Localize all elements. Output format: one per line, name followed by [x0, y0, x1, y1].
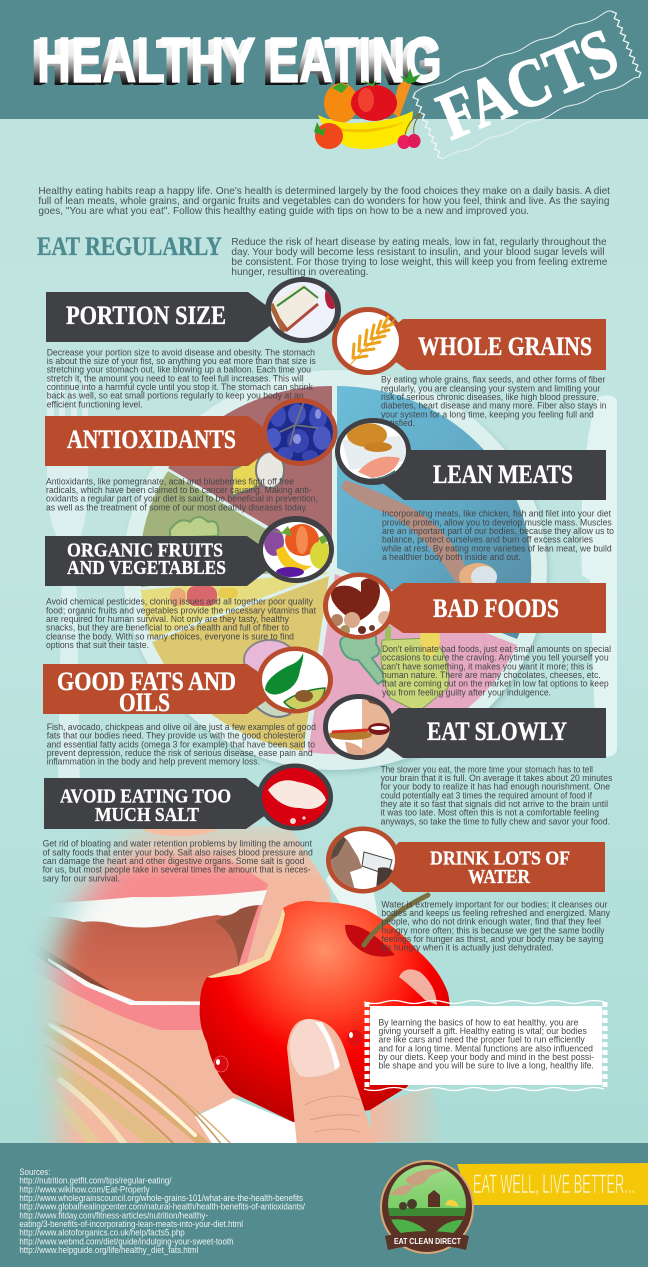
text: options that suit their taste.: [46, 640, 149, 651]
icon: avocado: [257, 646, 333, 714]
stem: [364, 895, 428, 945]
icon: man drinking: [326, 826, 400, 894]
text: sary for our survival.: [43, 873, 120, 884]
text: [46, 597, 316, 651]
sources list: eating/3-benefits-of-incorporating-lean-meats-into-your-diet.html: [19, 1218, 243, 1229]
text: you from feeling guilty after your indulgence.: [382, 687, 551, 698]
intro text: full of lean meats, whole grains, and organic fruits and vegetables can do wonders for how you feel, think and live. As the saying: [38, 196, 610, 207]
sources list: http://www.alotoforganics.co.uk/help/facts5.php: [19, 1227, 185, 1238]
heading: PORTION SIZE: [66, 301, 226, 330]
heading: [430, 848, 570, 888]
banner: [382, 319, 606, 370]
text: Fish, avocado, chickpeas and olive oil are just a few examples of good: [47, 722, 316, 733]
text: provide protein, allow you to develop muscle mass. Muscles: [382, 517, 612, 528]
text: diabetes, heart disease and many more. Fiber also stays in: [381, 401, 607, 412]
icon: salt: [257, 764, 333, 830]
water drops: [214, 1056, 228, 1072]
text: is about the size of your fist, so anything you eat more than that size is: [47, 356, 316, 367]
text: [381, 899, 610, 954]
text: eat regularly: [231, 237, 608, 278]
panel: organic fruits and vegetables: [45, 516, 334, 651]
intro text: [38, 186, 610, 217]
text: fats that our bodies need. They provide us with the good cholesterol: [47, 731, 305, 742]
right hand: [370, 1085, 445, 1142]
text: Incorporating meats, like chicken, fish and filet into your diet: [382, 509, 611, 520]
footer band: [0, 1143, 648, 1267]
upper lip: [67, 850, 268, 902]
nose shadow: [142, 818, 218, 836]
text: Antioxidants, like pomegranate, acai and blueberries fight off free: [46, 476, 294, 487]
text: and essential fatty acids (omega 3 for example) that have been said to: [47, 739, 315, 750]
icon: chicken and salmon: [335, 418, 412, 485]
hair: [40, 1020, 232, 1145]
heading: BAD FOODS: [433, 594, 559, 623]
bite flesh: [207, 908, 285, 978]
banner: [384, 450, 606, 500]
text: eat regularly: be consistent. For those trying to lose weight, this will keep you from feeling extreme: [231, 257, 608, 268]
text: oxidants a regular part of your diet is said to be beneficial in prevention,: [46, 494, 318, 505]
tan wedge: [152, 576, 329, 751]
apple highlight: [399, 969, 437, 1005]
header band: [0, 0, 648, 119]
text: they ate it so fast that signals did not arrive to the brain until: [381, 799, 608, 810]
icon: fruit bowl: [314, 68, 421, 149]
panel: avoid eating too much salt: [43, 764, 333, 884]
panel: bad foods: [323, 572, 611, 698]
text: continue into a harmful cycle until you stop it. The stomach can shrink: [47, 382, 313, 393]
callout: conclusion: ble shape and you will be sure to live a long, healthy life.: [378, 1061, 594, 1072]
banner: [44, 778, 270, 829]
intro text: goes, "You are what you eat". Follow this healthy eating guide with tips on how to be a new and improved you.: [38, 206, 529, 217]
title: HEALTHY EATING: [37, 24, 442, 96]
callout: conclusion: [364, 1000, 605, 1090]
lower lip: [44, 963, 202, 1030]
text: [381, 375, 607, 429]
panel: lean meats: [335, 418, 614, 563]
banner: [46, 292, 275, 342]
text: can't have something, it makes you want it more; this is: [382, 661, 593, 672]
text: a healthier body both inside and out.: [382, 552, 521, 563]
banner: [380, 583, 606, 633]
face skin: [41, 826, 332, 1143]
banner: [43, 664, 270, 714]
sources list: http://www.wholegrainscouncil.org/whole-grains-101/what-are-the-health-benefits: [19, 1192, 303, 1203]
text: stretch it, the amount you need to eat to feel full increases. This will: [47, 373, 304, 384]
text: [381, 509, 614, 563]
title: HEALTHY EATING: [35, 26, 441, 98]
apple: [200, 895, 450, 1122]
sources list: http://www.globalhealingcenter.com/natural-health/health-benefits-of-antioxidants/: [19, 1201, 305, 1212]
logo: eat clean direct: [380, 1160, 474, 1254]
text: eat regularly: hunger, resulting in overeating.: [231, 267, 369, 278]
banner: [45, 416, 272, 466]
panel: good fats and oils: [43, 646, 333, 768]
text: eat regularly: day. Your body will become less resistant to insulin, and your blood sugar levels will: [231, 247, 604, 258]
text: stretching your stomach out, like blowing up a balloon. Each time you: [47, 365, 311, 376]
callout: conclusion: By learning the basics of how to eat healthy, you are: [378, 1017, 578, 1028]
heading: LEAN MEATS: [433, 460, 573, 489]
text: eat regularly: Reduce the risk of heart disease by eating meals, low in fat, regularly throughout the: [231, 237, 607, 248]
text: anyways, so take the time to fully chew and savor your food.: [381, 816, 610, 827]
face group with soft left edge: [36, 826, 332, 1143]
callout: conclusion: and for a long time. Mental functions are also influenced: [378, 1043, 593, 1054]
heading: GOOD FATS AND: [57, 667, 236, 696]
apple dimple: [345, 925, 395, 957]
knife: [581, 395, 617, 757]
blue wedge: [337, 386, 531, 639]
sources list: http://nutrition.getfit.com/tips/regular-eating/: [19, 1175, 172, 1186]
text: [382, 644, 611, 698]
icon: chocolate: [323, 572, 395, 640]
mouth interior: [43, 905, 259, 1001]
text: are an important part of our bodies, because they allow us to: [382, 526, 614, 537]
lower teeth: [48, 958, 205, 1005]
sources list: http://www.wikihow.com/Eat-Properly: [19, 1183, 150, 1194]
text: regularly, you are cleansing your system and limiting your: [381, 383, 601, 394]
panel: whole grains: [332, 307, 607, 429]
panel: eat slowly: [323, 694, 613, 827]
text: satisfied.: [381, 418, 415, 429]
text: By eating whole grains, flax seeds, and other forms of fiber: [381, 375, 606, 386]
heading: WHOLE GRAINS: [418, 332, 592, 361]
heading: OILS: [119, 688, 170, 717]
text: inflammation in the body and help prevent memory loss.: [47, 757, 260, 768]
heading: AVOID EATING TOO: [60, 786, 231, 808]
intro text: Healthy eating habits reap a happy life. One's health is determined largely by the food choices they make on a daily basis. A diet: [38, 186, 610, 197]
upper teeth: [48, 890, 267, 928]
text: it's hungry when it is actually just dehydrated.: [381, 943, 554, 954]
text: efficient functioning level.: [47, 399, 143, 410]
icon: sandwich: [265, 277, 341, 343]
text: The slower you eat, the more time your stomach has to tell: [381, 764, 593, 775]
sources list: http://www.helpguide.org/life/healthy_diet_fats.html: [19, 1244, 198, 1255]
sources list: http://www.webmd.com/diet/guide/indulging-your-sweet-tooth: [19, 1235, 234, 1246]
sources list: http://www.fitday.com/fitness-articles/nutrition/healthy-: [19, 1209, 208, 1220]
callout: conclusion: giving yourself a gift. Healthy eating is vital; our bodies: [378, 1026, 587, 1037]
title: HEALTHY EATING: [33, 26, 439, 98]
heading: DRINK LOTS OF: [430, 848, 570, 870]
text: Decrease your portion size to avoid disease and obesity. The stomach: [47, 348, 315, 358]
text: [47, 722, 316, 768]
text: balance, protect ourselves and burn off excess calories: [382, 535, 593, 546]
shirt: [195, 1098, 300, 1145]
banner: [380, 708, 606, 758]
text: [43, 839, 313, 884]
panel: portion size: [46, 277, 341, 410]
text: could potentially eat 3 times the required amount of food if: [381, 790, 592, 801]
text: Avoid chemical pesticides, cloning issues and all together poor quality: [46, 597, 313, 608]
neck highlight: [326, 850, 380, 930]
fork: [47, 378, 88, 790]
text: [381, 764, 613, 827]
heading: MUCH SALT: [95, 804, 199, 826]
text: snacks, but they are beneficial to one's health and full of fiber to: [46, 623, 289, 634]
heading: WATER: [468, 866, 530, 888]
wedge food drawings: [170, 452, 497, 717]
icon: woman eating: [323, 694, 396, 760]
text: [46, 476, 318, 513]
text: it was too late. Most often this is not a comfortable feeling: [381, 808, 599, 819]
text: back as well, so eat small portions regularly to keep you body at an: [47, 391, 304, 402]
text: risk of serious chronic diseases, like high blood pressure,: [381, 392, 599, 403]
icon: fruits: [258, 516, 334, 583]
finger: [287, 1019, 376, 1145]
text: hungry more often; this is because we get the same bodily: [381, 925, 605, 936]
text: can damage the heart and other digestive organs. Some salt is good: [43, 856, 304, 867]
lip corner sliver: [237, 884, 268, 967]
text: of salty foods that enter your body. Salt also raises blood pressure and: [43, 847, 313, 858]
text: occasions to cure the craving. Anytime you tell yourself you: [382, 653, 609, 664]
title: HEALTHY EATING: [31, 26, 437, 98]
text: human nature. There are many chocolates, cheeses, etc.: [382, 670, 601, 681]
heading: ANTIOXIDANTS: [67, 425, 236, 454]
icon: wheat: [332, 307, 404, 375]
text: bodies and keeps us feeling refreshed and energized. Many: [381, 908, 610, 919]
text: prevent depression, reduce the risk of serious disease, ease pain and: [47, 748, 313, 759]
heading: [57, 667, 236, 717]
text: for us, but most people take in several times the amount that is neces-: [43, 865, 311, 876]
heading: AND VEGETABLES: [67, 557, 226, 579]
text: as well as the treatment of some of our most deathly diseases today.: [46, 502, 308, 513]
plate illustration: [47, 370, 617, 790]
sources list: Sources:: [19, 1166, 50, 1177]
callout: conclusion: are like cars and need the proper fuel to run efficiently: [378, 1035, 585, 1046]
logo: eat clean direct: EAT CLEAN DIRECT: [394, 1236, 462, 1246]
text: your system for a long time, keeping you feeling full and: [381, 409, 594, 420]
banner: [384, 842, 605, 892]
slogan banner: [457, 1163, 648, 1205]
text: feelings for hunger as thirst, and your body may be saying: [381, 934, 603, 945]
red wedge: [168, 386, 332, 563]
mouth and apple illustration: [36, 826, 450, 1143]
text: radicals, which have been claimed to be cancer causing. Making anti-: [46, 485, 312, 496]
text: Water is extremely important for our bodies; it cleanses our: [381, 899, 608, 910]
pink wedge: [308, 574, 517, 754]
heading: eat regularly: EAT REGULARLY: [37, 232, 222, 261]
heading: EAT SLOWLY: [427, 717, 567, 746]
text: while at rest. By eating more varieties of lean meat, we build: [381, 543, 612, 554]
heading: [67, 540, 226, 579]
callout: conclusion: by our diets. Keep your body and mind in the best possi-: [378, 1052, 594, 1063]
panel: antioxidants: [45, 398, 338, 513]
heading: [60, 786, 231, 826]
text: food; organic fruits and vegetables provide the necessary vitamins that: [46, 605, 316, 616]
banner: [45, 536, 270, 586]
panel: drink lots of water: [326, 826, 610, 954]
text: your brain that it is full. On average it takes about 20 minutes: [381, 773, 613, 784]
text: are required for human survival. Not only are they tasty, healthy: [46, 614, 289, 625]
yellow wedge: [141, 572, 330, 639]
heading: ORGANIC FRUITS: [67, 540, 223, 562]
green wedge: [140, 471, 330, 587]
text: that are coming out on the market in low fat options to keep: [382, 679, 609, 690]
text: Don't eliminate bad foods, just eat small amounts on special: [382, 644, 611, 655]
sources list: [19, 1166, 305, 1255]
text: cleanse the body. With so many choices, everyone is sure to find: [46, 631, 294, 642]
text: for your body to realize it has had enough nourishment. One: [381, 782, 610, 793]
text: Get rid of bloating and water retention problems by limiting the amount: [43, 839, 312, 850]
text: [47, 348, 316, 410]
text: people, who do not drink enough water, find that they feel: [381, 917, 601, 928]
icon: grapes: [262, 398, 338, 466]
